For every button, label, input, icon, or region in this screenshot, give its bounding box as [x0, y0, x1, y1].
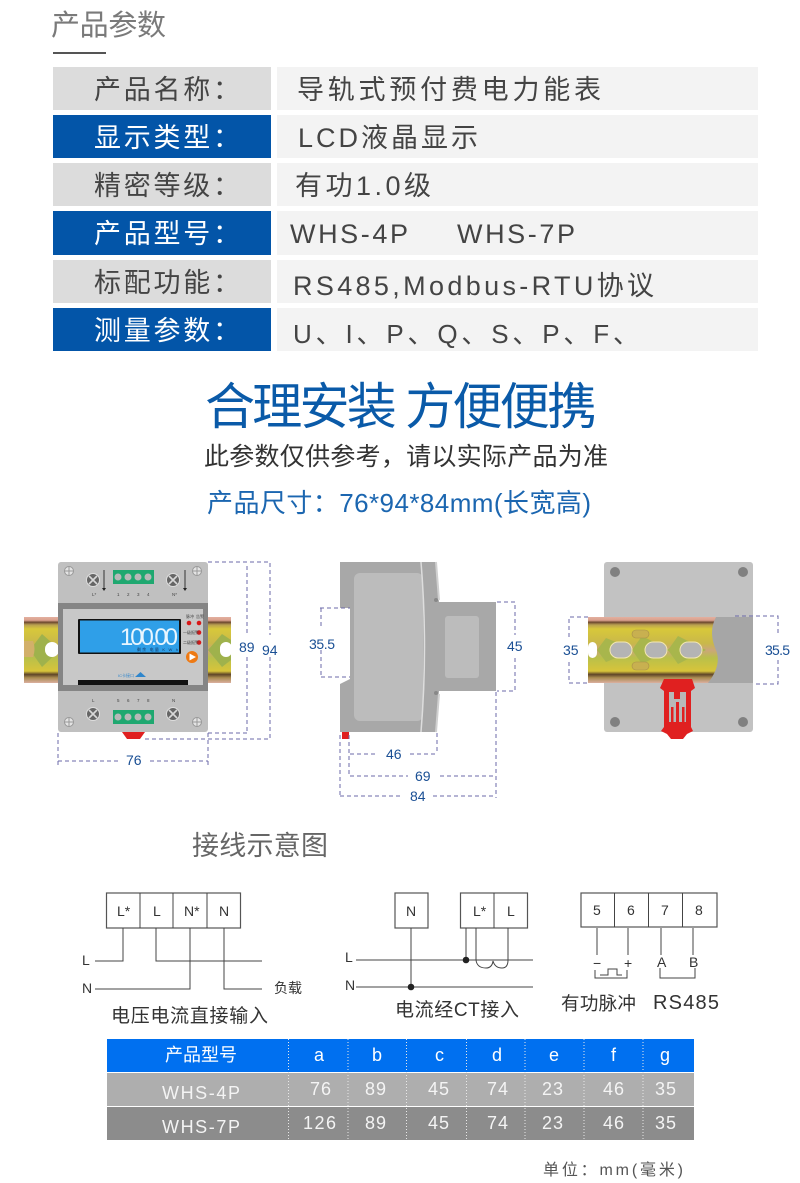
row WHS-4P: 23 — [542, 1079, 563, 1099]
caption: 电流经CT接入 — [395, 999, 519, 1021]
caption — [561, 992, 719, 1014]
wiring: direct input: N — [219, 903, 229, 919]
dim labels: 89 — [239, 639, 255, 655]
header row: a — [314, 1045, 325, 1065]
heading: wiring diagram: 接线示意图 — [192, 831, 328, 861]
indicator labels: 脉冲 — [186, 613, 194, 619]
row WHS-4P: 74 — [487, 1079, 508, 1099]
row WHS-7P — [162, 1113, 676, 1137]
row: 显示类型: 显示类型： — [94, 123, 240, 153]
wiring: CT input — [345, 893, 533, 1021]
terminal numbers: 4 — [147, 592, 150, 597]
row WHS-7P: 23 — [542, 1113, 563, 1133]
dim labels: 45 — [507, 638, 523, 654]
IC card mark: IC卡接口 — [118, 672, 134, 678]
terminal numbers: 6 — [127, 698, 130, 703]
row: 显示类型: LCD液晶显示 — [298, 123, 478, 153]
row: 精密等级: 有功1.0级 — [295, 171, 431, 201]
heading: 产品参数: 产品参数 — [51, 9, 166, 42]
terminal numbers: 2 — [127, 592, 130, 597]
display caption: 剩余 电量 K W h — [137, 646, 178, 652]
row: 产品型号: WHS-7P — [457, 219, 575, 249]
dim labels — [309, 636, 523, 804]
header row: b — [372, 1045, 382, 1065]
row: 产品型号: WHS-4P — [290, 219, 408, 249]
terminal numbers: 8 — [147, 698, 150, 703]
wiring: direct input: L — [153, 903, 161, 919]
row: 产品型号: 产品型号： — [94, 219, 240, 249]
wiring: pulse and RS485: 7 — [661, 902, 669, 918]
terminal numbers: L — [92, 698, 95, 703]
size table — [107, 1039, 694, 1140]
row WHS-4P: 46 — [603, 1079, 624, 1099]
wiring: CT input: L — [345, 949, 353, 965]
row WHS-7P: 74 — [487, 1113, 508, 1133]
unit note: 单位：mm(毫米) — [543, 1160, 683, 1179]
row: 产品名称: 产品名称： — [94, 75, 240, 105]
row: 标配功能 — [53, 260, 758, 303]
front view of meter — [24, 562, 278, 768]
dim labels — [563, 642, 790, 658]
terminal numbers: N* — [172, 592, 177, 597]
wiring: pulse and RS485: 5 — [593, 902, 601, 918]
header row — [165, 1045, 670, 1065]
row: 产品型号 — [53, 211, 758, 255]
row WHS-7P: 46 — [603, 1113, 624, 1133]
rail with slots — [588, 617, 753, 683]
wiring: direct input: N — [82, 980, 92, 996]
wiring: direct input: 负载 — [274, 980, 302, 996]
dim labels: 76 — [126, 752, 142, 768]
note: 此参数仅供参考，请以实际产品为准 — [204, 443, 608, 471]
row WHS-7P: 45 — [428, 1113, 449, 1133]
dim labels: 69 — [415, 768, 431, 784]
header row: g — [660, 1045, 670, 1065]
wiring: direct input: L* — [117, 903, 131, 919]
row WHS-4P: 45 — [428, 1079, 449, 1099]
red clip — [660, 679, 695, 739]
wiring: CT input: N — [406, 903, 416, 919]
wiring: pulse and RS485: A — [657, 954, 667, 970]
terminal numbers: 7 — [137, 698, 140, 703]
dim labels — [126, 639, 278, 768]
row WHS-7P: 35 — [655, 1113, 676, 1133]
terminal numbers: 5 — [117, 698, 120, 703]
row: 标配功能: 标配功能： — [94, 268, 240, 298]
IC card mark — [118, 672, 146, 678]
headline: 合理安装 方便便携 — [205, 379, 597, 435]
parameter table — [53, 67, 758, 351]
product dimensions: 产品尺寸：76*94*84mm(长宽高) — [207, 488, 591, 518]
back plate — [604, 562, 753, 732]
row WHS-4P: 76 — [310, 1079, 331, 1099]
wiring: direct input: N* — [184, 903, 200, 919]
row: 测量参数: 测量参数： — [94, 316, 240, 346]
din rail — [24, 617, 232, 683]
dim labels: 46 — [386, 746, 402, 762]
indicator labels: 二级报警 — [183, 639, 199, 645]
terminal numbers: N — [172, 698, 175, 703]
back view of meter — [563, 562, 790, 739]
row: 产品名称 — [53, 67, 758, 110]
dim labels: 94 — [262, 642, 278, 658]
wiring: pulse and RS485: 8 — [695, 902, 703, 918]
header row: c — [435, 1045, 444, 1065]
row: 精密等级 — [53, 163, 758, 206]
indicator labels — [183, 613, 204, 645]
wiring: CT input: L — [507, 903, 515, 919]
wiring: pulse and RS485 — [561, 893, 719, 1014]
row: 精密等级: 精密等级： — [94, 171, 240, 201]
caption: 电压电流直接输入 — [111, 1005, 268, 1027]
row: 产品名称: 导轨式预付费电力能表 — [297, 75, 601, 105]
terminal numbers: 1 — [117, 592, 120, 597]
row WHS-7P: WHS-7P — [162, 1117, 240, 1137]
wiring: pulse and RS485: + — [624, 955, 632, 971]
dimension lines — [58, 562, 270, 765]
wiring: CT input: L* — [473, 903, 487, 919]
terminal numbers — [92, 592, 177, 703]
row: 标配功能: RS485,Modbus-RTU协议 — [293, 271, 654, 301]
row WHS-4P: WHS-4P — [162, 1083, 240, 1103]
wiring: direct input — [82, 893, 302, 1027]
side view of meter — [309, 562, 523, 804]
display digits: 100.00 — [120, 624, 178, 651]
dimension lines — [569, 616, 778, 684]
row: 显示类型 — [53, 115, 758, 158]
header row: d — [492, 1045, 502, 1065]
terminal numbers: 3 — [137, 592, 140, 597]
header row: 产品型号 — [165, 1045, 237, 1065]
header row: e — [549, 1045, 559, 1065]
dim labels: 35.5 — [765, 642, 790, 658]
row WHS-7P: 89 — [365, 1113, 386, 1133]
row WHS-4P: 89 — [365, 1079, 386, 1099]
dim labels: 35 — [563, 642, 579, 658]
wiring: pulse and RS485: B — [689, 954, 698, 970]
caption: 有功脉冲 — [561, 993, 636, 1014]
meter body — [58, 562, 208, 739]
row WHS-4P — [162, 1079, 676, 1103]
header row: f — [611, 1045, 617, 1065]
caption: RS485 — [653, 992, 719, 1014]
dim labels: 35.5 — [309, 636, 335, 652]
terminal numbers: L* — [92, 592, 97, 597]
dimension lines — [320, 602, 515, 798]
wiring: CT input: N — [345, 977, 355, 993]
dim labels: 84 — [410, 788, 426, 804]
indicator labels: 一级报警 — [183, 629, 199, 635]
row: 测量参数 — [53, 308, 758, 351]
row: 测量参数: U、I、P、Q、S、P、F、 — [293, 319, 639, 349]
wiring: pulse and RS485: 6 — [627, 902, 635, 918]
indicator labels: 告警 — [196, 613, 204, 619]
wiring: direct input: L — [82, 952, 90, 968]
side body — [340, 562, 496, 739]
wiring: pulse and RS485: − — [593, 955, 601, 971]
row WHS-7P: 126 — [303, 1113, 336, 1133]
row WHS-4P: 35 — [655, 1079, 676, 1099]
